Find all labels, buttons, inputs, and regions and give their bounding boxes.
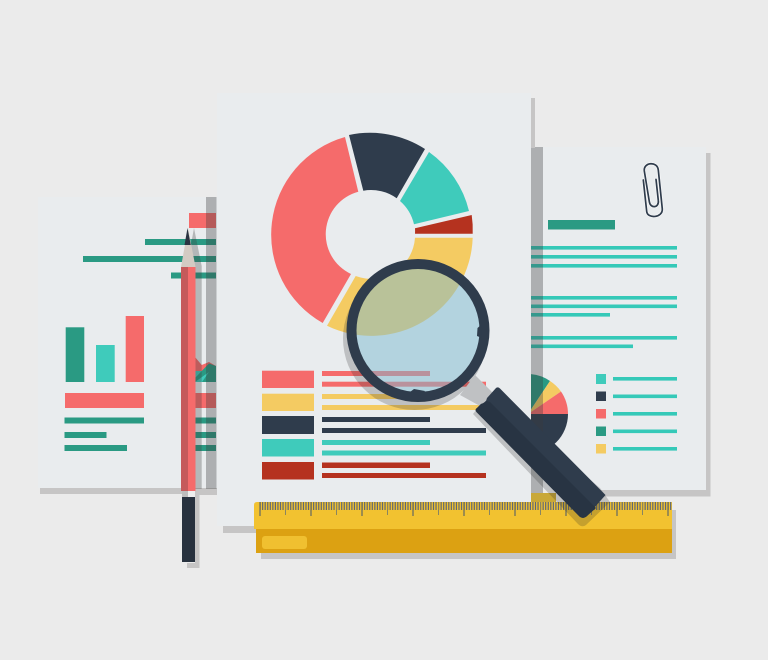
pencil ferrule bbox=[182, 491, 195, 497]
pencil graphite bbox=[184, 228, 191, 245]
legend row: navy bbox=[262, 416, 486, 434]
repeated bars: left document right edge bbox=[195, 393, 216, 451]
pencil bbox=[181, 228, 202, 568]
pie chart: right document bbox=[531, 374, 568, 444]
legend row: teal bbox=[262, 439, 486, 456]
panel: main document bbox=[217, 93, 535, 533]
pencil shadow bbox=[190, 228, 202, 489]
donut chart bbox=[271, 133, 473, 336]
bar chart: left document bbox=[66, 316, 144, 382]
pencil end bbox=[182, 497, 195, 562]
ruler ticks bbox=[260, 502, 672, 516]
legend row: yellow bbox=[262, 394, 486, 411]
lens bbox=[356, 268, 480, 392]
pencil wood tip bbox=[181, 228, 196, 267]
text lines: right document bbox=[531, 246, 677, 348]
text lines: left document lower bbox=[64, 418, 144, 451]
legend: right document bbox=[596, 374, 677, 454]
panel: right document bbox=[531, 147, 710, 502]
magnifier shadow bbox=[343, 306, 610, 526]
legend row: coral bbox=[262, 371, 486, 388]
lens rim bbox=[352, 264, 484, 397]
shadow of main document on right document bbox=[531, 147, 543, 493]
area chart: left document bbox=[195, 357, 216, 382]
heading bar: left document top bbox=[189, 213, 216, 228]
heading bar: left document bbox=[65, 393, 144, 408]
magnifier neck bbox=[460, 375, 493, 406]
legend row: red bbox=[262, 462, 486, 480]
heading bar: right document bbox=[548, 220, 615, 230]
shadow of main document bbox=[206, 197, 216, 489]
icon: paperclip bbox=[643, 164, 662, 217]
illustration: documents with charts, pencil, magnifier and ruler bbox=[40, 98, 710, 568]
text lines: left document upper bbox=[83, 239, 216, 278]
magnifying glass bbox=[343, 264, 610, 526]
magnifier handle bbox=[476, 387, 606, 518]
ruler label slot bbox=[262, 536, 307, 549]
pencil body bbox=[181, 267, 196, 491]
panel: left document bbox=[38, 197, 218, 495]
ruler bbox=[254, 502, 676, 559]
